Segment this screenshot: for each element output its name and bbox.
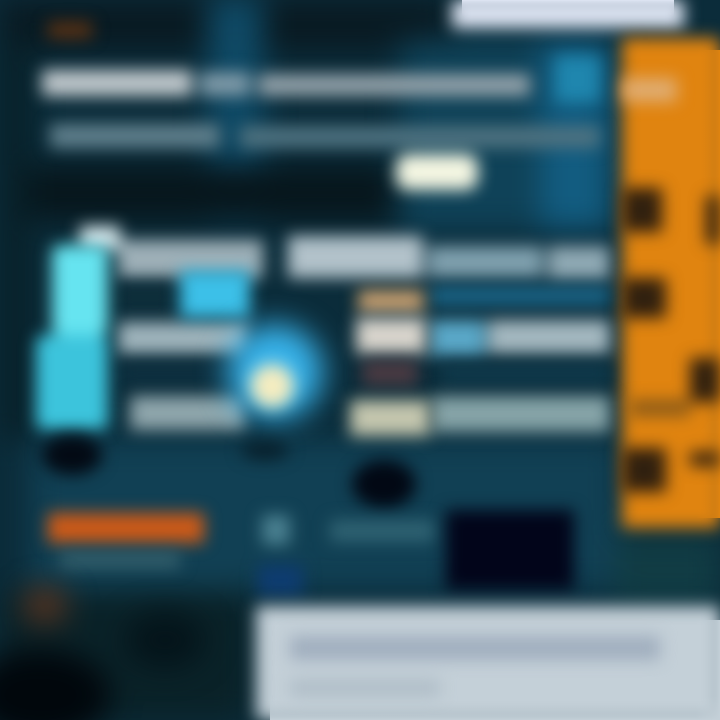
glow core: [250, 364, 294, 408]
table row 3: [130, 396, 610, 432]
banner body: [452, 0, 684, 28]
card bottom edge: [270, 696, 720, 720]
orange body: [622, 38, 720, 528]
orange right edge: [696, 50, 720, 518]
dark cell below: [362, 360, 418, 386]
dark blobs under table: [42, 435, 416, 508]
panel: right orange column: [622, 38, 720, 528]
card right edge: [696, 620, 720, 720]
title placeholder: second line: [50, 124, 600, 148]
small orange tag: [48, 22, 92, 38]
table row 2: [118, 320, 610, 356]
top white banner: [452, 0, 684, 28]
mid bottom teal patches: [258, 515, 435, 595]
table block: [80, 226, 610, 432]
table gap 2: [120, 364, 610, 384]
panel: bottom white card: [256, 606, 720, 720]
orange button: [48, 513, 204, 543]
cyan square shape: [180, 270, 250, 318]
card body: [256, 606, 720, 720]
glow halo: [227, 324, 323, 420]
black box: [446, 510, 574, 590]
card text lines: [290, 636, 660, 696]
pale cell lower: [350, 400, 430, 436]
orange panel marks: [622, 188, 720, 492]
banner top edge: [462, 0, 674, 16]
title placeholder: first line: [42, 56, 677, 102]
tan highlighted cell: [358, 290, 424, 312]
cyan left shape: [36, 245, 108, 430]
white pill: [396, 154, 478, 190]
glow icon: [227, 324, 323, 420]
table gap 1: [115, 286, 610, 308]
caption under button: [60, 552, 180, 568]
table row 1: [80, 226, 610, 280]
pale highlighted cell: [356, 318, 426, 354]
bottom-left dark shapes: [0, 587, 205, 720]
